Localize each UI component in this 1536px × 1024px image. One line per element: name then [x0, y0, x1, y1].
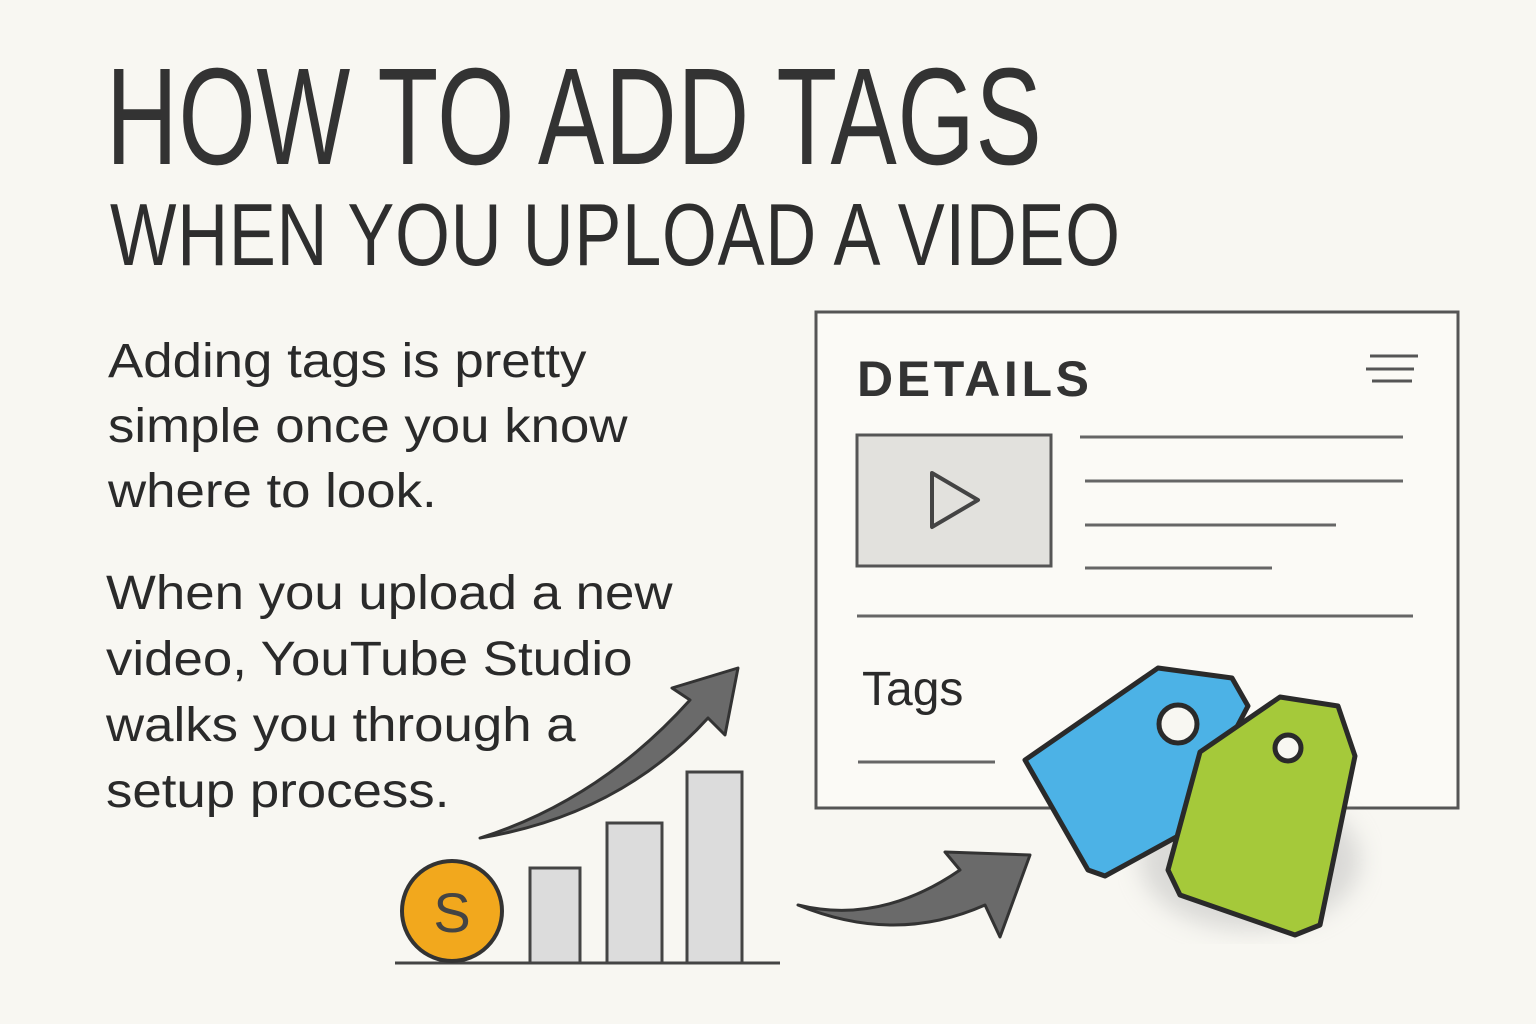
text block: intro: where to look. — [108, 465, 437, 518]
arrow: growth — [480, 668, 738, 838]
icon: menu — [1366, 356, 1418, 381]
text block: upload process: setup process. — [106, 765, 449, 818]
text block: intro — [108, 335, 628, 518]
panel: details window — [816, 312, 1458, 808]
heading: details: DETAILS — [857, 351, 1089, 407]
text block: intro: simple once you know — [108, 400, 627, 453]
text block: upload process: When you upload a new — [106, 567, 673, 620]
text block: intro: Adding tags is pretty — [108, 335, 586, 388]
icon: video thumbnail — [857, 435, 1051, 566]
text lines — [857, 437, 1413, 762]
text block: upload process — [106, 567, 673, 818]
bar chart — [395, 772, 780, 963]
arrow: to tags — [798, 852, 1030, 937]
icon: tags — [1025, 668, 1360, 935]
subtitle: WHEN YOU UPLOAD A VIDEO — [110, 185, 1121, 284]
text block: upload process: video, YouTube Studio — [106, 633, 632, 686]
label: tags: Tags — [862, 663, 963, 716]
text block: upload process: walks you through a — [106, 699, 576, 752]
icon: coin — [402, 861, 502, 961]
title: HOW TO ADD TAGS — [106, 40, 1042, 194]
icon: coin: S — [433, 881, 471, 944]
